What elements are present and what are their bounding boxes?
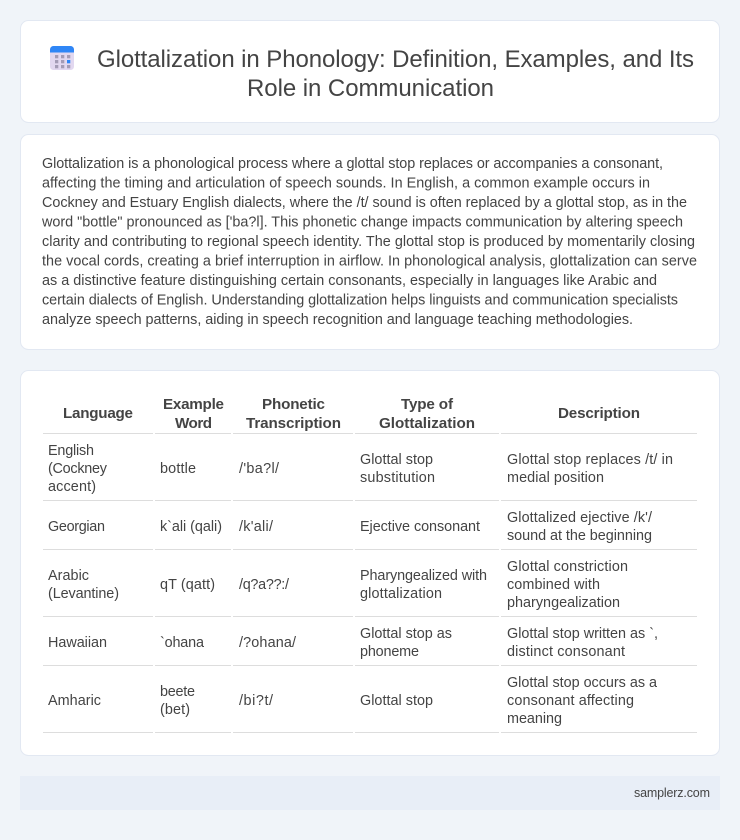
table row: English: accent)	[48, 479, 96, 495]
panel: glottalization table	[20, 370, 720, 756]
table row: Georgian: /k'ali/	[239, 519, 273, 535]
table row: Hawaiian: /?ohana/	[239, 635, 296, 651]
table row: English: bottle	[160, 461, 196, 477]
table row: Hawaiian: phoneme	[360, 644, 419, 660]
text block: definition: as a distinctive feature distinguishing certain consonants, especially in languages like Arabic and	[42, 273, 657, 289]
table row: Hawaiian: Glottal stop written as `,	[507, 626, 658, 642]
table header row: Word	[175, 415, 212, 432]
table row: Arabic: /q?a??:/	[239, 577, 289, 593]
title: Role in Communication	[247, 75, 494, 102]
table row: Arabic: glottalization	[360, 586, 442, 602]
table row: Arabic: Glottal constriction	[507, 559, 628, 575]
table row: Amharic: beete	[160, 684, 195, 700]
table header row	[63, 396, 640, 432]
table row: Georgian	[48, 510, 652, 544]
table row: English: Glottal stop replaces /t/ in	[507, 452, 673, 468]
text block: definition: analyze speech patterns, aiding in speech recognition and language teaching methodologies.	[42, 312, 633, 328]
table row: English: substitution	[360, 470, 435, 486]
table row: English: English	[48, 443, 94, 459]
text block: definition: the vocal cords, creating a brief interruption in airflow. In phonological analysis, glottalization can serve	[42, 254, 697, 270]
table row: Amharic: Amharic	[48, 693, 101, 709]
table row: Hawaiian: Hawaiian	[48, 635, 107, 651]
table row: English: (Cockney	[48, 461, 108, 477]
table header row: Glottalization	[379, 415, 475, 432]
footer bar: samplerz.com	[634, 786, 710, 800]
table row: Arabic: qT (qatt)	[160, 577, 215, 593]
text block: definition: certain dialects of English. Understanding glottalization helps linguists and communication specialists	[42, 292, 678, 308]
table row: Hawaiian: Glottal stop as	[360, 626, 452, 642]
table row: English	[48, 443, 673, 495]
table header row: Type of	[401, 396, 454, 413]
table row: Hawaiian	[48, 626, 658, 660]
table header row: Language	[63, 405, 133, 422]
table row: Arabic: combined with	[507, 577, 600, 593]
table row: Amharic: meaning	[507, 711, 562, 727]
table row: Georgian: sound at the beginning	[507, 528, 652, 544]
panel: title header	[20, 20, 720, 122]
table row: Amharic: Glottal stop occurs as a	[507, 675, 657, 691]
title: Glottalization in Phonology: Definition, Examples, and Its	[97, 46, 694, 73]
table row: English: Glottal stop	[360, 452, 433, 468]
table row: Arabic: Arabic	[48, 568, 89, 584]
icon: calendar	[50, 46, 74, 70]
table row: Arabic: pharyngealization	[507, 595, 620, 611]
table row: Amharic: /bi?t/	[239, 693, 273, 709]
table header row: Description	[558, 405, 640, 422]
table header row: Phonetic	[262, 396, 325, 413]
table row: Arabic: Pharyngealized with	[360, 568, 487, 584]
table row: Amharic: (bet)	[160, 702, 190, 718]
table row: English: /'ba?l/	[239, 461, 279, 477]
panel: definition paragraph	[20, 134, 720, 350]
text block: definition	[41, 156, 697, 328]
table row: Hawaiian: `ohana	[160, 635, 204, 651]
text block: definition: Cockney and Estuary English dialects, where the /t/ sound is often replaced by a glottal stop, as in the	[42, 195, 687, 211]
table header row: Transcription	[246, 415, 341, 432]
table header row: Example	[163, 396, 224, 413]
table row: Georgian: Glottalized ejective /k'/	[507, 510, 652, 526]
table row: Amharic: consonant affecting	[507, 693, 634, 709]
table row: Georgian: k`ali (qali)	[160, 519, 222, 535]
table row: Amharic: Glottal stop	[360, 693, 433, 709]
title	[97, 46, 694, 102]
table row: Georgian: Georgian	[48, 519, 105, 535]
footer bar	[20, 776, 720, 810]
text block: definition: Glottalization is a phonological process where a glottal stop replaces or accompanies a consonant,	[42, 156, 663, 172]
table row: Amharic	[48, 675, 657, 727]
text block: definition: clarity and contributing to regional speech identity. The glottal stop is produced by momentarily closing	[42, 234, 695, 250]
table row: Arabic: (Levantine)	[48, 586, 119, 602]
text block: definition: affecting the timing and articulation of speech sounds. In English, a common example occurs in	[42, 176, 650, 192]
table row: English: medial position	[507, 470, 604, 486]
table row: Arabic	[48, 559, 628, 611]
text block: definition: word "bottle" pronounced as ['ba?l]. This phonetic change impacts communication by altering speech	[41, 214, 683, 230]
table row: Georgian: Ejective consonant	[360, 519, 480, 535]
table row: Hawaiian: distinct consonant	[507, 644, 625, 660]
